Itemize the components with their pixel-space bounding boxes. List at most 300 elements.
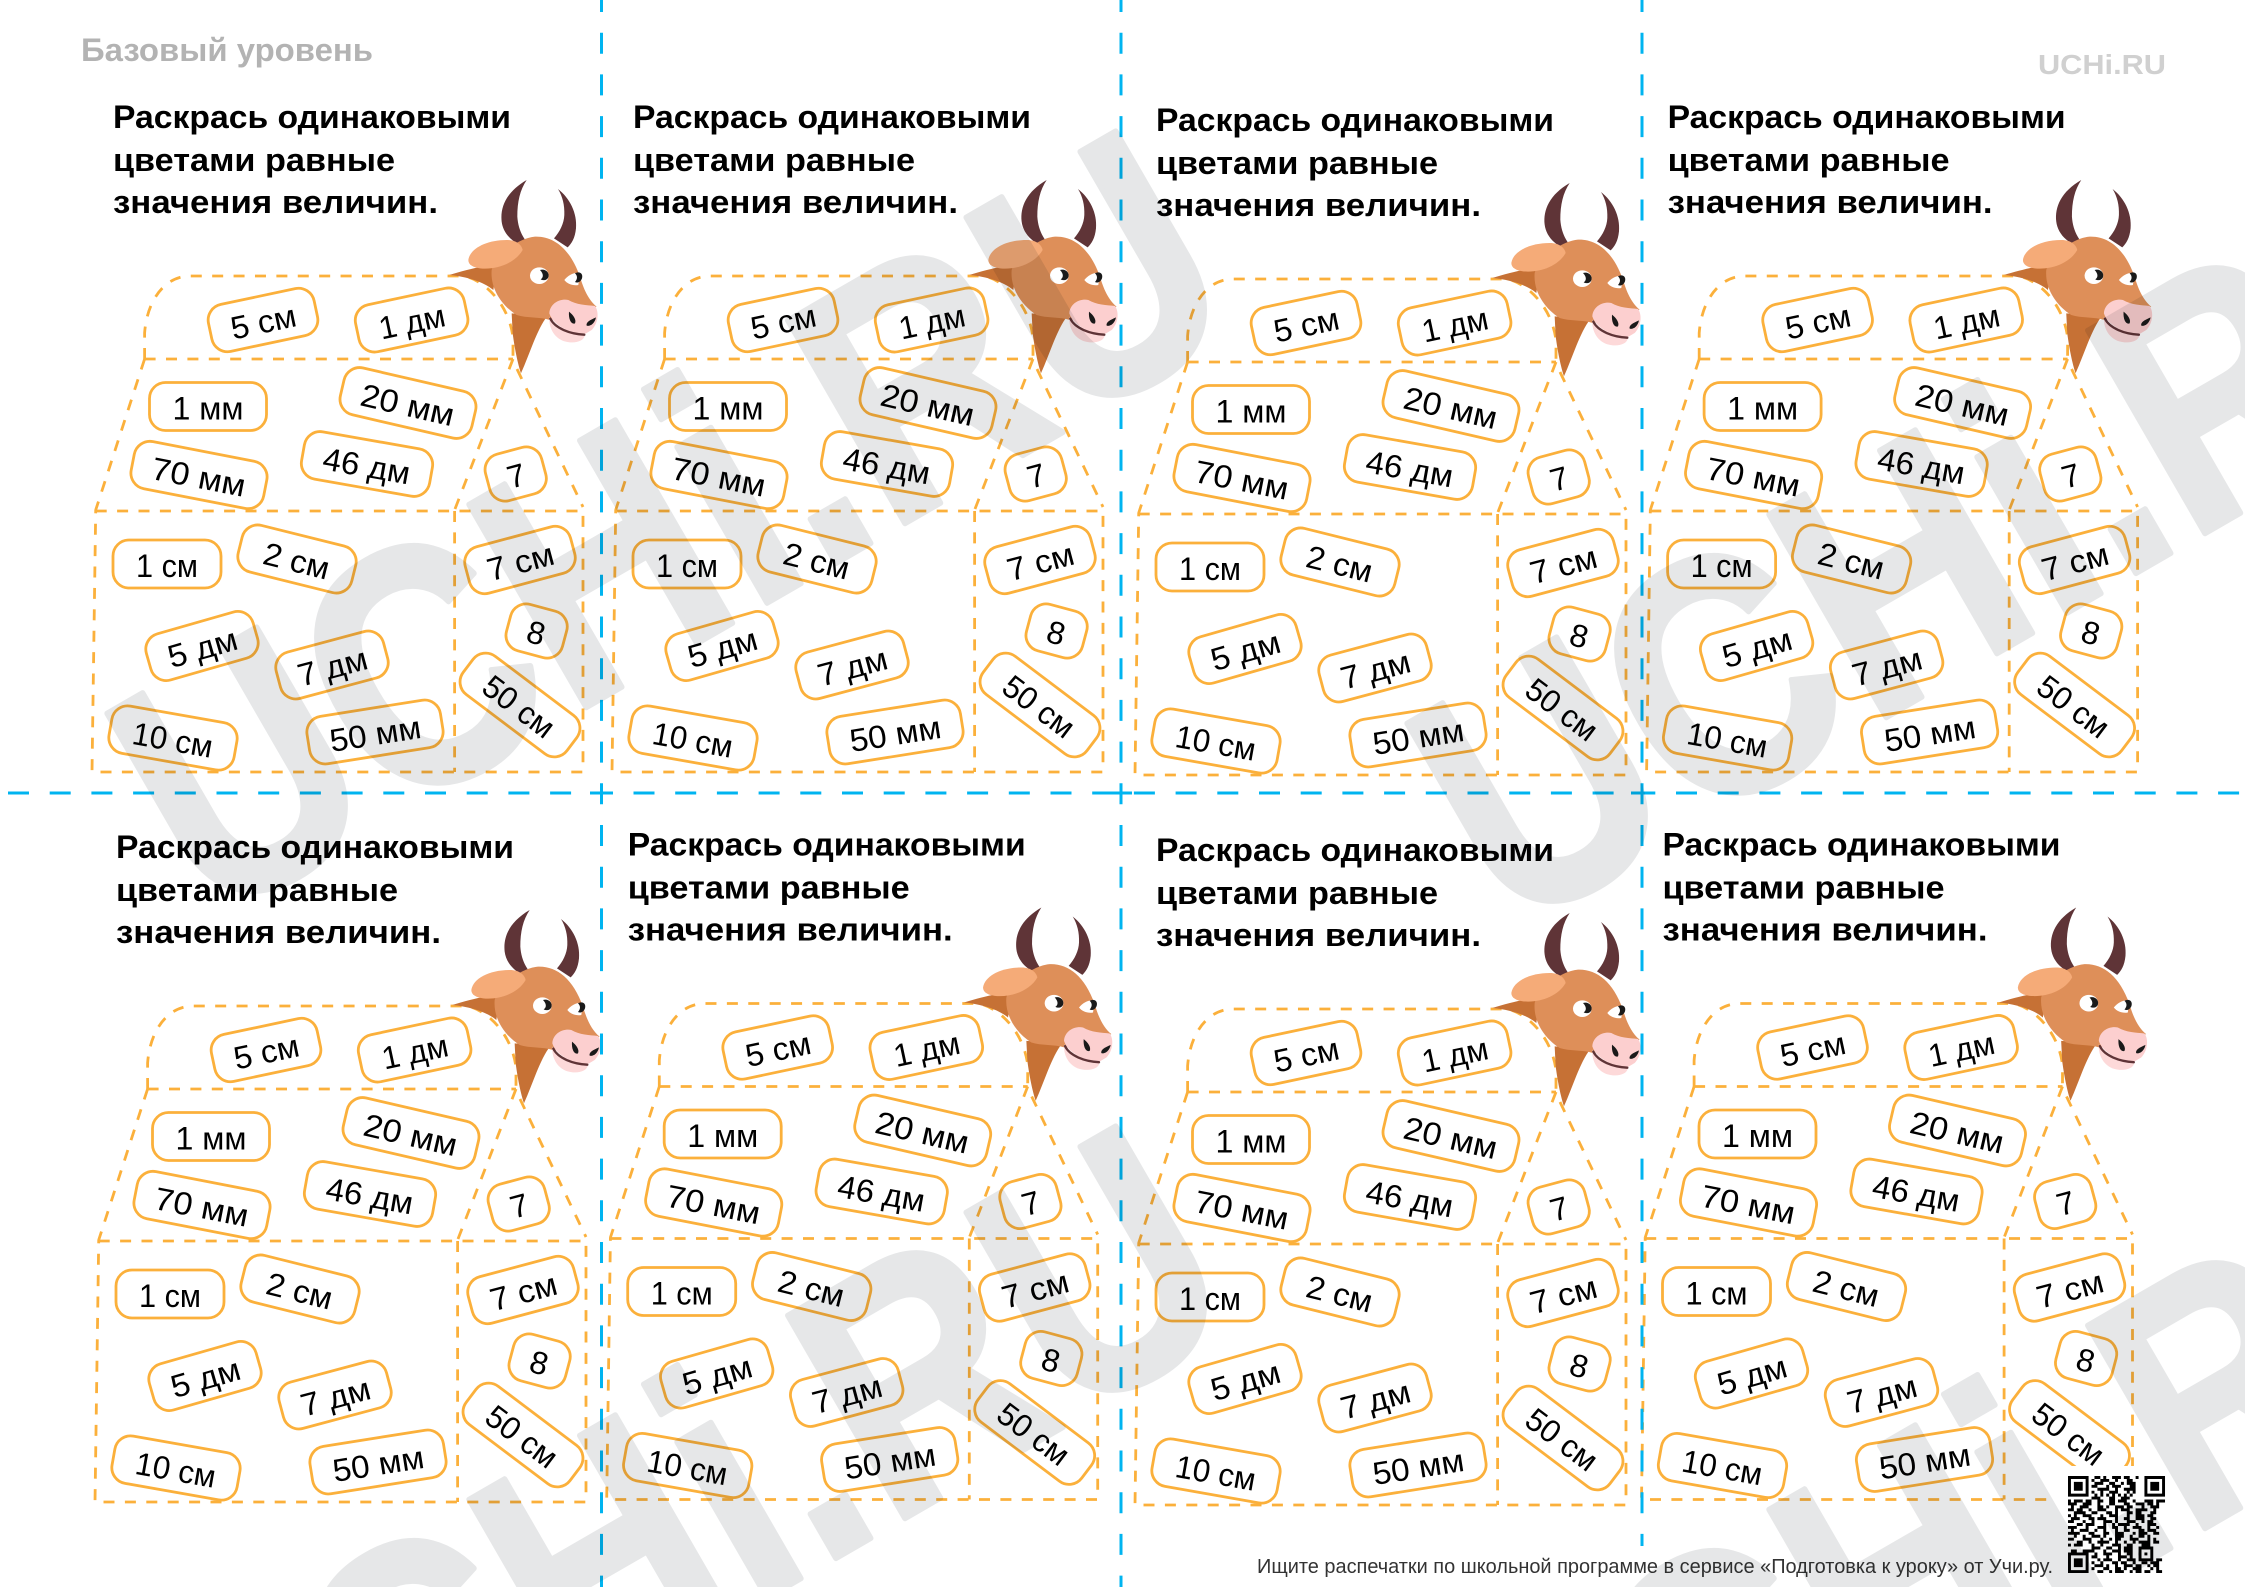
panel: card 3: [1135, 102, 1641, 776]
tag: 2 см: 2 см: [1303, 538, 1376, 590]
tag: 1 дм: 1 дм: [1419, 1030, 1492, 1080]
tag: 1 мм: [1192, 386, 1310, 434]
tag: 7: 7: [506, 1186, 532, 1226]
tag: 10 см: [1656, 1431, 1789, 1500]
tag: 7 дм: [275, 1357, 395, 1433]
tag: 2 см: 2 см: [1303, 1268, 1376, 1320]
tag: 2 см: 2 см: [260, 535, 333, 587]
tag: 20 мм: [340, 1094, 482, 1172]
tag: 2 см: 2 см: [780, 535, 853, 587]
tag: 50 см: [2008, 647, 2141, 763]
tag: 5 см: [725, 285, 841, 355]
tag: 5 см: 5 см: [1777, 1025, 1849, 1074]
tag: 7: [2031, 1171, 2099, 1232]
tag: 1 дм: [872, 285, 991, 355]
tag: 1 см: [1662, 1268, 1770, 1316]
tag: 7 дм: 7 дм: [808, 1368, 886, 1421]
tag: 70 мм: 70 мм: [663, 1178, 763, 1231]
tag: 1 см: 1 см: [656, 548, 718, 584]
tag: 46 дм: 46 дм: [320, 441, 413, 491]
tag: 1 мм: 1 мм: [1722, 1118, 1793, 1154]
tag: 70 мм: [643, 1166, 785, 1239]
tag: 10 см: [621, 1431, 754, 1500]
tag: 70 мм: 70 мм: [1192, 453, 1292, 507]
tag: 1 см: 1 см: [139, 1278, 201, 1314]
tag: 1 мм: [664, 1110, 781, 1158]
tag: 8: 8: [1043, 613, 1069, 653]
tag: 1 мм: [150, 382, 266, 430]
tag: 8: [505, 1330, 574, 1392]
tag: 5 дм: [1697, 608, 1817, 684]
tag: 10 см: 10 см: [130, 715, 216, 765]
instruction heading: [1156, 832, 1554, 953]
tag: 5 см: 5 см: [742, 1025, 814, 1074]
tag: 50 мм: 50 мм: [842, 1437, 938, 1486]
tag: 50 мм: [1854, 1425, 1995, 1494]
tag: 70 мм: [1678, 1166, 1819, 1239]
tag: 20 мм: 20 мм: [1912, 377, 2012, 433]
dashed bull body outline: [95, 1006, 586, 1502]
page label: базовый уровень: Базовый уровень: [81, 32, 373, 68]
tag: 10 см: 10 см: [1173, 1448, 1259, 1498]
dashed bull body outline: [612, 276, 1103, 772]
tag: 70 мм: [1683, 439, 1824, 511]
tag: 46 дм: [302, 1159, 438, 1229]
tag: 2 см: [234, 522, 360, 596]
tag: 10 см: 10 см: [650, 715, 736, 765]
tag: 70 мм: 70 мм: [1698, 1178, 1798, 1231]
tag: 1 дм: [352, 285, 471, 355]
tag: 46 дм: [1342, 432, 1478, 502]
tag: 1 дм: [1395, 288, 1514, 358]
instruction heading: значения величин.: [116, 914, 441, 950]
tag: 20 мм: [1380, 367, 1522, 445]
tag: 1 см: 1 см: [1691, 548, 1753, 584]
tag: 46 дм: 46 дм: [835, 1168, 928, 1219]
tag: 7: [1001, 443, 1070, 505]
tag: 8: 8: [2072, 1341, 2099, 1380]
tag: 8: 8: [1038, 1341, 1064, 1380]
tag: 50 мм: 50 мм: [1370, 1442, 1467, 1492]
instruction heading: цветами равные: [1156, 875, 1438, 911]
panel: card 4: [1647, 99, 2152, 773]
tag: 7 см: [2016, 523, 2133, 597]
tag: 5 дм: [1692, 1335, 1811, 1412]
tag: 7 см: [2011, 1250, 2128, 1325]
tag: 1 дм: [1902, 1012, 2020, 1083]
tag: 8: [1545, 1333, 1614, 1395]
instruction heading: Раскрась одинаковыми: [1156, 832, 1554, 868]
instruction heading: значения величин.: [633, 184, 958, 220]
tag: 46 дм: 46 дм: [1870, 1168, 1963, 1219]
tag: 5 см: 5 см: [747, 297, 819, 346]
tag: 10 см: [106, 703, 240, 773]
tag: 1 мм: [670, 382, 786, 430]
QR code: [2052, 1466, 2177, 1587]
tag: 7 см: [1504, 1256, 1622, 1330]
tag: 2 см: 2 см: [774, 1263, 848, 1314]
tag: 7: [481, 443, 550, 505]
instruction heading: Раскрась одинаковыми: [1668, 99, 2066, 135]
panel: card 2: [612, 99, 1118, 773]
tag: 5 дм: [1185, 1341, 1305, 1417]
icon: bull head: [1999, 907, 2147, 1101]
tag: 2 см: [1277, 525, 1403, 599]
tag: 2 см: [1277, 1255, 1403, 1329]
tag: 50 мм: 50 мм: [327, 709, 424, 759]
icon: bull head: [964, 907, 1112, 1101]
tag: 10 см: 10 см: [133, 1445, 219, 1495]
tag: 8: [2052, 1328, 2120, 1389]
instruction heading: [628, 826, 1026, 948]
tag: 46 дм: [1342, 1162, 1478, 1232]
tag: 7: [2036, 443, 2105, 505]
panel: card 1: [92, 99, 598, 773]
icon: bull head: [449, 180, 598, 373]
tag: 46 дм: [1848, 1157, 1985, 1226]
tag: 7 см: 7 см: [1526, 539, 1601, 591]
tag: 1 см: 1 см: [1179, 551, 1241, 587]
tag: 50 см: [457, 1377, 589, 1493]
tag: 7 дм: [1315, 630, 1435, 706]
instruction heading: [1668, 99, 2066, 220]
tag: 70 мм: [128, 439, 270, 511]
tag: 10 см: [1661, 703, 1794, 773]
instruction heading: [633, 99, 1031, 220]
instruction heading: [1156, 102, 1554, 223]
tag: 20 мм: [337, 364, 479, 442]
tag: 5 дм: 5 дм: [163, 621, 242, 675]
tag: 20 мм: 20 мм: [357, 377, 458, 433]
tag: 5 см: [205, 285, 321, 355]
tag: 10 см: [1149, 1436, 1283, 1506]
tag: 46 дм: 46 дм: [1363, 1174, 1456, 1224]
icon: bull head: [452, 910, 601, 1103]
tag: 1 см: [113, 540, 221, 588]
icon: bull head: [969, 180, 1118, 373]
tag: 7 дм: 7 дм: [1337, 1373, 1414, 1427]
tag: 46 дм: 46 дм: [323, 1171, 416, 1221]
tag: 1 мм: [1699, 1110, 1816, 1158]
tag: 1 мм: 1 мм: [687, 1118, 758, 1154]
tag: 20 мм: [852, 1092, 994, 1169]
tag: 5 см: [1248, 288, 1364, 358]
instruction heading: цветами равные: [628, 870, 910, 906]
tag: 70 мм: 70 мм: [152, 1180, 252, 1234]
tag: 5 см: 5 см: [1782, 297, 1854, 346]
tag: 50 см: [1497, 1380, 1629, 1496]
tag: 1 дм: 1 дм: [379, 1027, 452, 1077]
tag: 46 дм: [1853, 429, 1990, 499]
tag: 70 мм: 70 мм: [669, 450, 769, 504]
tag: 1 мм: 1 мм: [692, 390, 764, 426]
tag: 7 см: 7 см: [998, 1263, 1073, 1316]
tag: 1 дм: 1 дм: [896, 297, 969, 347]
tag: 1 мм: 1 мм: [176, 1120, 246, 1156]
tag: 7 см: [1504, 526, 1622, 600]
tag: 8: 8: [2077, 613, 2104, 653]
instruction heading: Раскрась одинаковыми: [1156, 102, 1554, 138]
tag: 70 мм: [131, 1169, 273, 1241]
tag: 20 мм: [1891, 364, 2034, 442]
tag: 7 см: 7 см: [486, 1266, 561, 1318]
tag: 10 см: 10 см: [644, 1443, 730, 1492]
tag: 7: 7: [503, 456, 529, 496]
tag: 50 мм: [1348, 1431, 1488, 1499]
tag: 5 см: [1755, 1013, 1870, 1082]
instruction heading: цветами равные: [113, 142, 395, 178]
tag: 20 мм: [1380, 1097, 1522, 1175]
instruction heading: [113, 99, 511, 220]
tag: 1 см: [116, 1270, 224, 1318]
tag: 1 дм: [1907, 285, 2025, 355]
dashed bull body outline: [92, 276, 583, 772]
tag: 5 см: 5 см: [1270, 300, 1342, 349]
instruction heading: значения величин.: [1668, 184, 1993, 220]
tag: 2 см: [237, 1252, 363, 1326]
tag: 50 см: 50 см: [1519, 1401, 1605, 1478]
tag: 2 см: [749, 1249, 874, 1324]
tag: 1 мм: [152, 1112, 270, 1160]
instruction heading: значения величин.: [628, 912, 953, 948]
tag: 46 дм: 46 дм: [840, 441, 933, 491]
tag: 10 см: 10 см: [1679, 1443, 1765, 1492]
tag: 46 дм: [814, 1157, 950, 1226]
tag: 5 дм: [1185, 611, 1305, 687]
tag: 1 мм: 1 мм: [172, 390, 244, 426]
tag: 50 см: [974, 647, 1106, 763]
instruction heading: цветами равные: [1156, 145, 1438, 181]
tag: 10 см: 10 см: [1684, 715, 1770, 765]
tag: 7 дм: 7 дм: [1337, 643, 1414, 697]
tag: 1 мм: [1704, 382, 1821, 430]
tag: 7 дм: 7 дм: [297, 1370, 374, 1424]
tag: 70 мм: [1171, 442, 1313, 514]
tag: 8: 8: [523, 613, 549, 653]
tag: 5 см: [208, 1015, 324, 1085]
tag: 46 дм: [299, 429, 435, 499]
tag: 50 см: [454, 647, 586, 763]
instruction heading: значения величин.: [1662, 912, 1988, 948]
tag: 8: [1017, 1328, 1086, 1389]
tag: 10 см: [626, 703, 760, 773]
tag: 50 мм: [1859, 698, 2000, 766]
tag: 5 см: 5 см: [1270, 1030, 1342, 1079]
tag: 1 дм: [355, 1015, 474, 1085]
instruction heading: цветами равные: [1668, 142, 1950, 178]
tag: 70 мм: [648, 439, 790, 511]
tag: 1 дм: [1395, 1018, 1514, 1088]
tag: 7: 7: [1018, 1184, 1044, 1223]
tag: 50 мм: [825, 698, 965, 766]
tag: 7 см: [976, 1250, 1094, 1325]
tag: 46 дм: 46 дм: [1875, 441, 1968, 491]
tag: 50 см: [2003, 1374, 2136, 1491]
instruction heading: [1662, 826, 2060, 948]
tag: 5 дм: 5 дм: [683, 621, 762, 675]
tag: 8: [1545, 603, 1614, 665]
panel: card 6: [607, 826, 1112, 1500]
tag: 7 дм: 7 дм: [294, 640, 371, 694]
tag: 2 см: [1784, 1249, 1909, 1324]
tag: 20 мм: [1886, 1092, 2029, 1169]
tag: 1 мм: 1 мм: [1216, 1124, 1286, 1160]
tag: 7: [996, 1171, 1065, 1232]
tag: 5 дм: 5 дм: [1206, 624, 1285, 678]
instruction heading: цветами равные: [1662, 870, 1944, 906]
tag: 20 мм: [857, 364, 999, 442]
tag: 1 дм: 1 дм: [1930, 297, 2003, 347]
tag: 1 мм: 1 мм: [1727, 390, 1798, 426]
tag: 7: 7: [1546, 1189, 1572, 1229]
tag: 7: 7: [1546, 459, 1572, 499]
tag: 70 мм: 70 мм: [1703, 450, 1803, 504]
tag: 20 мм: 20 мм: [1400, 1110, 1501, 1166]
icon: bull head: [2004, 180, 2152, 373]
tag: 1 см: 1 см: [651, 1276, 713, 1312]
tag: 8: 8: [526, 1343, 552, 1383]
tag: 50 см: 50 см: [990, 1395, 1077, 1473]
tag: 70 мм: 70 мм: [149, 450, 249, 504]
logo: UCHi.RU: UCHi.RU: [2038, 49, 2166, 80]
tag: 2 см: [1789, 522, 1914, 596]
dashed bull body outline: [1642, 1004, 2132, 1500]
tag: 7: 7: [1023, 456, 1049, 496]
tag: 20 мм: 20 мм: [360, 1107, 461, 1163]
icon: bull head: [1492, 913, 1641, 1106]
tag: 20 мм: 20 мм: [872, 1104, 973, 1161]
tag: 1 см: [1156, 543, 1264, 591]
tag: 50 см: 50 см: [2025, 1395, 2111, 1473]
tag: 50 см: [968, 1374, 1101, 1491]
tag: 5 см: [1760, 285, 1875, 355]
dashed bull body outline: [607, 1004, 1098, 1500]
icon: bull head: [1492, 183, 1641, 376]
tag: 7: 7: [2058, 456, 2084, 496]
tag: 46 дм: 46 дм: [1363, 444, 1456, 494]
tag: 2 см: 2 см: [1809, 1263, 1883, 1314]
tag: 20 мм: 20 мм: [1400, 380, 1501, 436]
tag: 2 см: 2 см: [263, 1265, 336, 1317]
tag: 1 дм: 1 дм: [890, 1025, 963, 1074]
dashed bull body outline: [1135, 1009, 1626, 1505]
tag: 5 дм: 5 дм: [678, 1348, 756, 1403]
tag: 10 см: 10 см: [1173, 718, 1259, 768]
tag: 50 см: [1497, 650, 1629, 766]
panel: card 7: [1135, 832, 1641, 1506]
tag: 1 дм: 1 дм: [1419, 300, 1492, 350]
tag: 1 см: 1 см: [1179, 1281, 1241, 1317]
tag: 50 мм: 50 мм: [1877, 1437, 1973, 1486]
tag: 20 мм: 20 мм: [1907, 1104, 2007, 1161]
tag: 7 дм: [272, 627, 392, 703]
tag: 50 мм: [305, 698, 445, 766]
tag: 7 см: [981, 523, 1099, 597]
tag: 1 мм: 1 мм: [1216, 394, 1286, 430]
tag: 7: [1524, 1176, 1593, 1238]
tag: 7 дм: 7 дм: [1848, 640, 1926, 694]
instruction heading: значения величин.: [113, 184, 438, 220]
tag: 50 мм: [1348, 701, 1488, 769]
tag: 1 мм: [1192, 1116, 1310, 1164]
tag: 7 см: 7 см: [2038, 536, 2113, 588]
instruction heading: Раскрась одинаковыми: [628, 826, 1026, 862]
tag: 5 дм: 5 дм: [1206, 1354, 1285, 1408]
tag: 5 см: [1248, 1018, 1364, 1088]
instruction heading: Раскрась одинаковыми: [116, 829, 514, 865]
instruction heading: цветами равные: [633, 142, 915, 178]
tag: 1 см: [1668, 540, 1776, 588]
tag: 7 см: [461, 523, 579, 597]
dashed bull body outline: [1135, 279, 1626, 775]
instruction heading: Раскрась одинаковыми: [1662, 826, 2060, 862]
tag: 5 дм: [662, 608, 782, 684]
panel: card 5: [95, 829, 601, 1503]
tag: 50 см: 50 см: [2030, 668, 2117, 745]
instruction heading: цветами равные: [116, 872, 398, 908]
tag: 7 дм: [1822, 1355, 1941, 1430]
instruction heading: значения величин.: [1156, 187, 1481, 223]
tag: 5 дм: [657, 1335, 777, 1412]
tag: 7 см: 7 см: [2033, 1263, 2108, 1316]
tag: 7: [484, 1173, 553, 1235]
tag: 7 дм: 7 дм: [814, 640, 891, 694]
tag: 5 см: [720, 1013, 836, 1082]
tag: 20 мм: 20 мм: [877, 377, 978, 433]
tag: 1 см: [633, 540, 741, 588]
instruction heading: значения величин.: [1156, 917, 1481, 953]
tag: 50 мм: 50 мм: [330, 1439, 427, 1489]
tag: 1 см: 1 см: [136, 548, 198, 584]
tag: 7 см: 7 см: [1003, 536, 1078, 588]
tag: 7 см: 7 см: [1526, 1269, 1601, 1321]
tag: 5 дм: 5 дм: [1713, 1348, 1791, 1403]
tag: 50 см: 50 см: [479, 1398, 565, 1475]
tag: 8: [1022, 600, 1091, 662]
tag: 70 мм: 70 мм: [1192, 1183, 1292, 1237]
tag: 5 дм: [145, 1338, 265, 1414]
tag: 50 см: 50 см: [476, 668, 562, 745]
panel: card 8: [1642, 826, 2147, 1500]
tag: 7: 7: [2052, 1184, 2079, 1223]
tag: 50 см: 50 см: [996, 668, 1082, 745]
tag: 10 см: [109, 1433, 243, 1503]
footer note: Ищите распечатки по школьной программе в сервисе «Подготовка к уроку» от Учи.ру.: [1257, 1556, 2053, 1578]
tag: 5 дм: [142, 608, 262, 684]
tag: 1 см: 1 см: [1686, 1276, 1748, 1312]
tag: 1 см: [1156, 1273, 1264, 1321]
tag: 50 мм: [819, 1425, 960, 1494]
tag: 7 см: 7 см: [483, 536, 558, 588]
tag: 50 мм: 50 мм: [847, 709, 944, 759]
tag: 8: 8: [1566, 1346, 1592, 1386]
tag: 7 дм: [792, 627, 912, 703]
tag: 1 дм: 1 дм: [1925, 1025, 1998, 1074]
tag: 7 дм: [1827, 627, 1946, 703]
tag: 7 дм: [787, 1355, 907, 1430]
tag: 5 дм: 5 дм: [166, 1351, 245, 1405]
tag: 5 см: 5 см: [230, 1027, 302, 1076]
tag: 7 см: [464, 1253, 582, 1327]
instruction heading: Раскрась одинаковыми: [113, 99, 511, 135]
tag: 8: 8: [1566, 616, 1592, 656]
tag: 1 дм: [867, 1012, 986, 1083]
tag: 50 мм: [308, 1428, 448, 1496]
tag: 8: [502, 600, 571, 662]
tag: 7 дм: 7 дм: [1843, 1368, 1921, 1421]
tag: 1 дм: 1 дм: [376, 297, 449, 347]
tag: 50 мм: 50 мм: [1882, 709, 1978, 759]
